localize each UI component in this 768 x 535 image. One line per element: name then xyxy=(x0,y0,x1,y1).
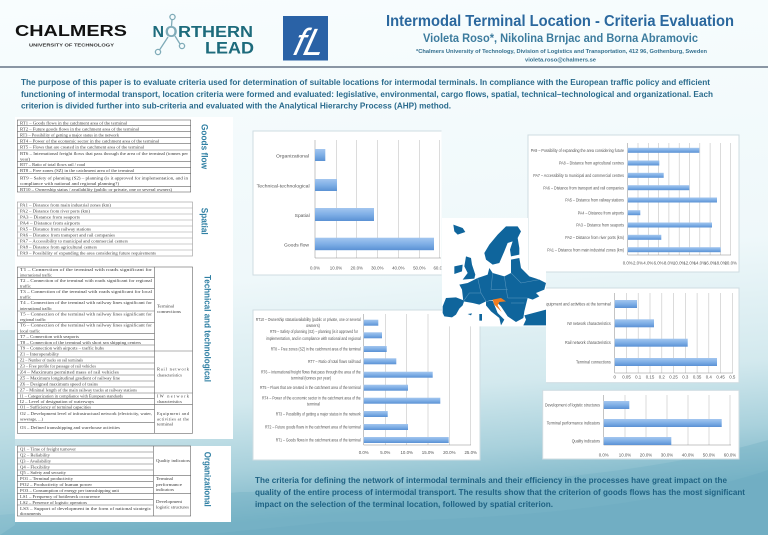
chart: technical sub-criteria: 0 xyxy=(613,374,616,380)
logo: Northern Lead: N xyxy=(152,24,164,41)
table: spatial: PA4 – Distance from airports xyxy=(20,221,80,226)
intro text xyxy=(21,77,713,110)
chart: goods flow sub-criteria: terminal (tonnes per year) xyxy=(291,376,331,380)
affiliation: violeta.roso@chalmers.se xyxy=(525,58,596,64)
chart: spatial sub-criteria: 8.0% xyxy=(664,260,674,266)
chart: main criteria: 60.0% xyxy=(433,266,446,270)
table: technical and technological: Z1 – Interoperability xyxy=(20,352,60,357)
chart: goods flow sub-criteria: 0.0% xyxy=(359,450,369,455)
chart: technical sub-criteria: 0.1 xyxy=(635,374,642,380)
logo: Northern Lead xyxy=(152,14,254,57)
table: technical and technological: I2 – Level of designation of waterways xyxy=(20,399,94,404)
logo: Northern Lead: RTHERN xyxy=(178,24,253,41)
table: technical and technological: T5 – Connection of the terminal with railway lines significant for xyxy=(20,311,153,316)
table: goods flow: year) xyxy=(20,156,31,161)
chart: goods flow sub-criteria: RT5 – Flows that are created in the catchment area of the terminal xyxy=(260,385,361,390)
map of Europe with Croatia highlighted xyxy=(442,218,546,326)
chart: goods flow sub-criteria: RT6 – International freight flows that pass through the area of the xyxy=(261,370,361,374)
table: spatial: PA2 – Distance from river ports (km) xyxy=(20,209,91,214)
chart: spatial sub-criteria: PA2 – Distance from river ports (km) xyxy=(565,235,624,240)
intro text: functioning of intermodal transport, location criteria were formed and evaluated: legislative, environmental, cargo flows, spatial, technical–technological and organizational. Each xyxy=(21,89,713,99)
table: goods flow: RT4 – Power of the economic sector in the catchment area of the terminal xyxy=(20,138,160,143)
chart: spatial sub-criteria: 20.0% xyxy=(724,260,737,266)
chart: goods flow sub-criteria: RT9 – Safety of planning (S2) – planning (is it approved for xyxy=(270,329,358,334)
table: technical and technological: Z4 – Maximum permitted mass of rail vehicles xyxy=(20,370,119,375)
label: technical and technological: Technical and technological xyxy=(202,275,212,382)
table: organizational: Development xyxy=(156,499,183,504)
conclusion text: impact on the selection of the terminal location, followed by spatial criterion. xyxy=(255,499,553,509)
table: spatial: PA7 – Accessibility to municipal and commercial centers xyxy=(20,239,128,244)
table: spatial: PA3 – Distance from seaports xyxy=(20,215,80,220)
chart: spatial sub-criteria: PA3 – Distance from seaports xyxy=(576,223,625,228)
table: goods flow: RT3 – Possibility of getting a major status in the network xyxy=(20,132,120,137)
chart: goods flow sub-criteria: 15.0% xyxy=(422,450,434,455)
table: organizational: PO2 – Productivity of human power xyxy=(20,482,93,487)
table: organizational: documents xyxy=(20,511,41,516)
table: technical and technological: sewerage, ...) xyxy=(20,417,44,423)
label: goods flow: Goods flow xyxy=(200,124,210,170)
chart: technical sub-criteria: 0.25 xyxy=(669,374,678,380)
table: organizational: PO1 – Terminal productivity xyxy=(20,476,74,481)
chart: technical sub-criteria: 0.05 xyxy=(622,374,631,380)
intro text: criterion is divided further into sub-criteria and evaluated with the Analytical Hierarchy Process (AHP) method. xyxy=(21,100,451,110)
table: technical and technological: local traffic xyxy=(20,328,40,333)
chart: spatial sub-criteria: PA8 – Distance from agricultural centres xyxy=(559,161,625,166)
chart: organizational sub-criteria: 0.0% xyxy=(599,452,609,458)
chart: technical sub-criteria: Terminal connections xyxy=(576,360,611,364)
table: goods flow: RT7 – Ratio of total flows rail / road xyxy=(20,162,86,167)
table: technical and technological: activities at the xyxy=(157,416,189,421)
chart: technical sub-criteria: 0.4 xyxy=(706,374,712,380)
table: technical and technological: T1 – Connection of the terminal with roads significant for xyxy=(20,267,153,272)
table: organizational: Quality indicators xyxy=(156,458,190,463)
table: technical and technological: characteristics xyxy=(157,399,182,404)
chart: goods flow sub-criteria: RT4 – Power of the economic sector in the catchment area of the xyxy=(262,396,361,400)
table: technical and technological: Rail network xyxy=(157,366,190,372)
chart: spatial sub-criteria: PA1 – Distance from main industrial zones (km) xyxy=(547,247,624,252)
chart: goods flow sub-criteria: terminal xyxy=(307,402,320,406)
table: technical and technological: O2 – Development level of infrastructural network (electricity, water, xyxy=(20,411,152,417)
logo: Northern Lead: LEAD xyxy=(205,40,254,58)
table: technical and technological: regional traffic xyxy=(20,317,46,322)
chart: goods flow sub-criteria: 25.0% xyxy=(464,450,477,455)
chart: main criteria: 0.0% xyxy=(310,266,320,270)
chart: goods flow sub-criteria: RT1 – Goods flows in the catchment area of the terminal xyxy=(276,438,361,442)
chart: goods flow sub-criteria: implementation, and in compliance with national and regional xyxy=(266,336,361,341)
logo: FL blue square: fL xyxy=(286,22,335,64)
table: technical and technological: characteristics xyxy=(157,372,182,378)
chart: spatial sub-criteria: 12.0% xyxy=(683,260,696,266)
chart: goods flow sub-criteria: 10.0% xyxy=(400,450,413,455)
table: technical and technological: T4 – Connection of the terminal with railway lines significant for xyxy=(20,300,153,305)
table: technical and technological: O1 – Sufficiency of terminal capacities xyxy=(20,405,91,410)
table: spatial: PA8 – Distance from agricultural centers xyxy=(20,245,97,250)
table: goods flow: RT6 – International freight flows that pass through the area of the terminal (tonnes per xyxy=(20,151,189,156)
chart: main criteria: 10.0% xyxy=(330,266,342,270)
table: spatial: PA6 – Distance from transport and rail companies xyxy=(20,233,115,238)
logo: Chalmers University of Technology: CHALMERS xyxy=(15,23,127,40)
title: Intermodal Terminal Location - Criteria Evaluation xyxy=(386,13,734,30)
chart: technical sub-criteria: 0.5 xyxy=(729,374,736,380)
chart: goods flow sub-criteria: RT7 – Ratio of total flows rail/road xyxy=(308,359,361,364)
logo: Chalmers University of Technology: UNIVERSITY OF TECHNOLOGY xyxy=(29,42,114,48)
chart: main criteria xyxy=(253,131,453,275)
chart: spatial sub-criteria: PA7 – Accessibility to municipal and commercial centres xyxy=(533,173,625,178)
chart: goods flow sub-criteria: 20.0% xyxy=(443,450,456,455)
affiliation xyxy=(416,49,707,64)
table: spatial: PA9 – Possibility of expanding the area considering future requirements xyxy=(20,251,156,256)
conclusion text xyxy=(255,475,745,509)
chart: spatial sub-criteria: 10.0% xyxy=(673,260,686,266)
table: technical and technological: I1 – Categorization in compliance with European standards xyxy=(20,393,123,398)
chart: spatial sub-criteria: 4.0% xyxy=(643,260,653,266)
table: goods flow: RT2 – Future goods flows in the catchment area of the terminal xyxy=(20,126,140,131)
chart: spatial sub-criteria: 16.0% xyxy=(704,260,716,266)
chart: technical sub-criteria: 0.15 xyxy=(646,374,655,380)
chart: spatial sub-criteria: PA9 – Possibility of expanding the area considering future xyxy=(531,148,624,153)
chart: goods flow sub-criteria: 5.0% xyxy=(380,450,390,455)
chart: technical sub-criteria: 0.45 xyxy=(716,374,725,380)
table: technical and technological xyxy=(17,267,192,433)
table: goods flow: RT8 – Free zones (SZ) in the catchment area of the terminal xyxy=(20,168,135,173)
chart: organizational sub-criteria: 10.0% xyxy=(619,452,631,458)
label: organizational: Organizational xyxy=(202,452,212,507)
logo: Northern Lead: O xyxy=(165,24,177,41)
table: goods flow: RT1 – Goods flows in the catchment area of the terminal xyxy=(20,120,128,126)
chart: spatial sub-criteria: 14.0% xyxy=(694,260,706,266)
table: technical and technological: T7 – Connection with seaports xyxy=(20,334,79,339)
table: goods flow: RT10 – Ownership status / availability (public or private, one or several owners) xyxy=(20,187,173,193)
table: organizational: indicators xyxy=(156,487,174,492)
table: technical and technological: international traffic xyxy=(20,306,52,311)
chart: spatial sub-criteria: 6.0% xyxy=(654,260,664,266)
table: technical and technological: T2 – Connection of the terminal with roads significant for regional xyxy=(20,278,153,283)
label: spatial: Spatial xyxy=(200,208,210,235)
chart: main criteria: 30.0% xyxy=(371,266,384,270)
table: organizational: LS1 – Frequency of bottleneck occurrence xyxy=(20,494,100,499)
table: organizational: LS2 – Presence of logistic operators xyxy=(20,500,87,505)
chart: main criteria: 50.0% xyxy=(413,266,426,270)
chart: main criteria: Technical-technological xyxy=(257,184,310,188)
table: technical and technological: O3 – Defined transshipping and warehouse activities xyxy=(20,425,120,430)
chart: organizational sub-criteria: Development of logistic structures xyxy=(545,402,601,408)
chart: goods flow sub-criteria: RT3 – Possibility of getting a major status in the network xyxy=(276,412,361,416)
table: technical and technological: terminal xyxy=(157,422,174,427)
chart: technical sub-criteria: Equipment and activities at the terminal xyxy=(544,302,611,306)
authors: Violeta Roso*, Nikolina Brnjac and Borna Abramovic xyxy=(423,31,698,45)
chart: spatial sub-criteria xyxy=(528,135,739,272)
table: organizational: Q5 – Safety and security xyxy=(20,470,67,475)
table: technical and technological: Z7 – Minimal length of the main railway tracks at railway stations xyxy=(20,388,137,393)
table: goods flow xyxy=(17,120,191,193)
table: technical and technological: Z2 – Number of tracks on rail terminals xyxy=(20,358,83,363)
table: technical and technological: Equipment and xyxy=(157,411,190,416)
table: goods flow: RT5 – Flows that are created in the catchment area of the terminal xyxy=(20,144,145,150)
table: organizational: Q4 – Flexibility xyxy=(20,465,51,470)
chart: organizational sub-criteria: 40.0% xyxy=(682,452,694,458)
panel: criteria tables backing xyxy=(15,117,233,522)
table: organizational: LS3 – Support of development in the form of national strategic xyxy=(20,506,151,511)
table: organizational xyxy=(17,446,191,516)
table: technical and technological: T9 – Connection with airports – traffic hubs xyxy=(20,346,104,351)
chart: spatial sub-criteria: 0.0% xyxy=(623,260,633,266)
chart: spatial sub-criteria: 18.0% xyxy=(714,260,727,266)
chart: organizational sub-criteria: 20.0% xyxy=(640,452,652,458)
chart: technical sub-criteria: 0.2 xyxy=(659,374,665,380)
table: organizational: Q3 – Availability xyxy=(20,459,52,464)
table: technical and technological: T6 – Connection of the terminal with railway lines significant for xyxy=(20,323,153,328)
table: organizational: performance xyxy=(156,482,182,487)
chart: main criteria: 40.0% xyxy=(392,266,405,270)
table: organizational: PO3 – Consumption of energy per transshipping unit xyxy=(20,488,120,493)
chart: main criteria: Organizational xyxy=(276,154,309,158)
chart: technical sub-criteria: Rail network characteristics xyxy=(565,340,611,345)
chart: organizational sub-criteria: 60.0% xyxy=(724,452,736,458)
table: spatial: PA5 – Distance from railway stations xyxy=(20,227,91,232)
chart: spatial sub-criteria: PA6 – Distance from transport and rail companies xyxy=(543,185,625,190)
table: technical and technological: traffic xyxy=(20,295,31,300)
table: technical and technological: T3 – Connection of the terminal with roads significant for local xyxy=(20,289,153,294)
chart: technical sub-criteria: 0.35 xyxy=(693,374,702,380)
logo: Chalmers University of Technology xyxy=(15,23,127,48)
chart: spatial sub-criteria: PA4 – Distance from airports xyxy=(578,210,625,215)
table: goods flow: RT9 – Safety of planning (S2) – planning (is it approved for implementation, and in xyxy=(20,176,189,182)
chart: technical sub-criteria: IW network characteristics xyxy=(567,321,611,326)
table: spatial: PA1 – Distance from main industrial zones (km) xyxy=(20,203,112,208)
affiliation: *Chalmers University of Technology, Division of Logistics and Transportation, 412 96, Gothenburg, Sweden xyxy=(416,49,707,55)
table: organizational: Q1 – Time of freight turnover xyxy=(20,447,77,452)
table: spatial xyxy=(17,202,192,256)
table: technical and technological: Z5 – Maximum longitudinal gradient of railway line xyxy=(20,376,120,381)
table: organizational: logistic structures xyxy=(156,505,189,510)
table: technical and technological: international traffic xyxy=(20,273,52,278)
chart: spatial sub-criteria: PA5 – Distance from railway stations xyxy=(565,198,625,203)
chart: technical sub-criteria: 0.3 xyxy=(682,374,689,380)
conclusion text: quality of the entire process of intermodal transport. The results show that the criterion of goods flows has the most significant xyxy=(255,487,745,497)
chart: spatial sub-criteria: 2.0% xyxy=(633,260,643,266)
table: technical and technological: T8 – Connection of the terminal with short sea shipping centers xyxy=(20,340,141,345)
conclusion text: The criteria for defining the network of intermodal terminals and their efficiency in the processes have great impact on the xyxy=(255,475,727,485)
table: organizational: Q2 – Reliability xyxy=(20,453,51,458)
table: technical and technological: IW network xyxy=(157,394,190,398)
chart: organizational sub-criteria xyxy=(543,390,739,459)
chart: goods flow sub-criteria: RT8 – Free zones (SZ) in the catchment area of the terminal xyxy=(271,346,361,352)
table: technical and technological: Z3 – Free profile for passage of rail vehicles xyxy=(20,364,96,369)
table: technical and technological: traffic xyxy=(20,284,31,289)
intro text: The purpose of this paper is to evaluate criteria used for determination of suitable locations for intermodal terminals. In compliance with the European traffic policy and efficient xyxy=(21,77,710,87)
chart: organizational sub-criteria: 50.0% xyxy=(703,452,715,458)
table: technical and technological: connections xyxy=(157,309,181,314)
chart: goods flow sub-criteria: RT10 – Ownership status/availability (public or private, one or several xyxy=(256,317,361,322)
chart: goods flow sub-criteria xyxy=(253,310,480,460)
table: goods flow: compliance with national and regional planning?) xyxy=(20,181,120,186)
chart: organizational sub-criteria: 30.0% xyxy=(661,452,673,458)
chart: main criteria: Spatial xyxy=(295,213,310,218)
table: organizational: Terminal xyxy=(156,476,174,481)
chart: main criteria: 20.0% xyxy=(350,266,363,270)
chart: organizational sub-criteria: Terminal performance indicators xyxy=(547,420,601,426)
table: technical and technological: Z6 – Designed maximum speed of trains xyxy=(20,382,98,387)
chart: goods flow sub-criteria: RT2 – Future goods flows in the catchment area of the terminal xyxy=(265,424,361,430)
chart: goods flow sub-criteria: owners) xyxy=(306,323,320,328)
chart: main criteria: Goods flow xyxy=(284,242,310,248)
table: technical and technological: Terminal xyxy=(157,304,175,308)
chart: organizational sub-criteria: Quality indicators xyxy=(572,438,601,444)
chart: technical sub-criteria xyxy=(543,288,739,383)
